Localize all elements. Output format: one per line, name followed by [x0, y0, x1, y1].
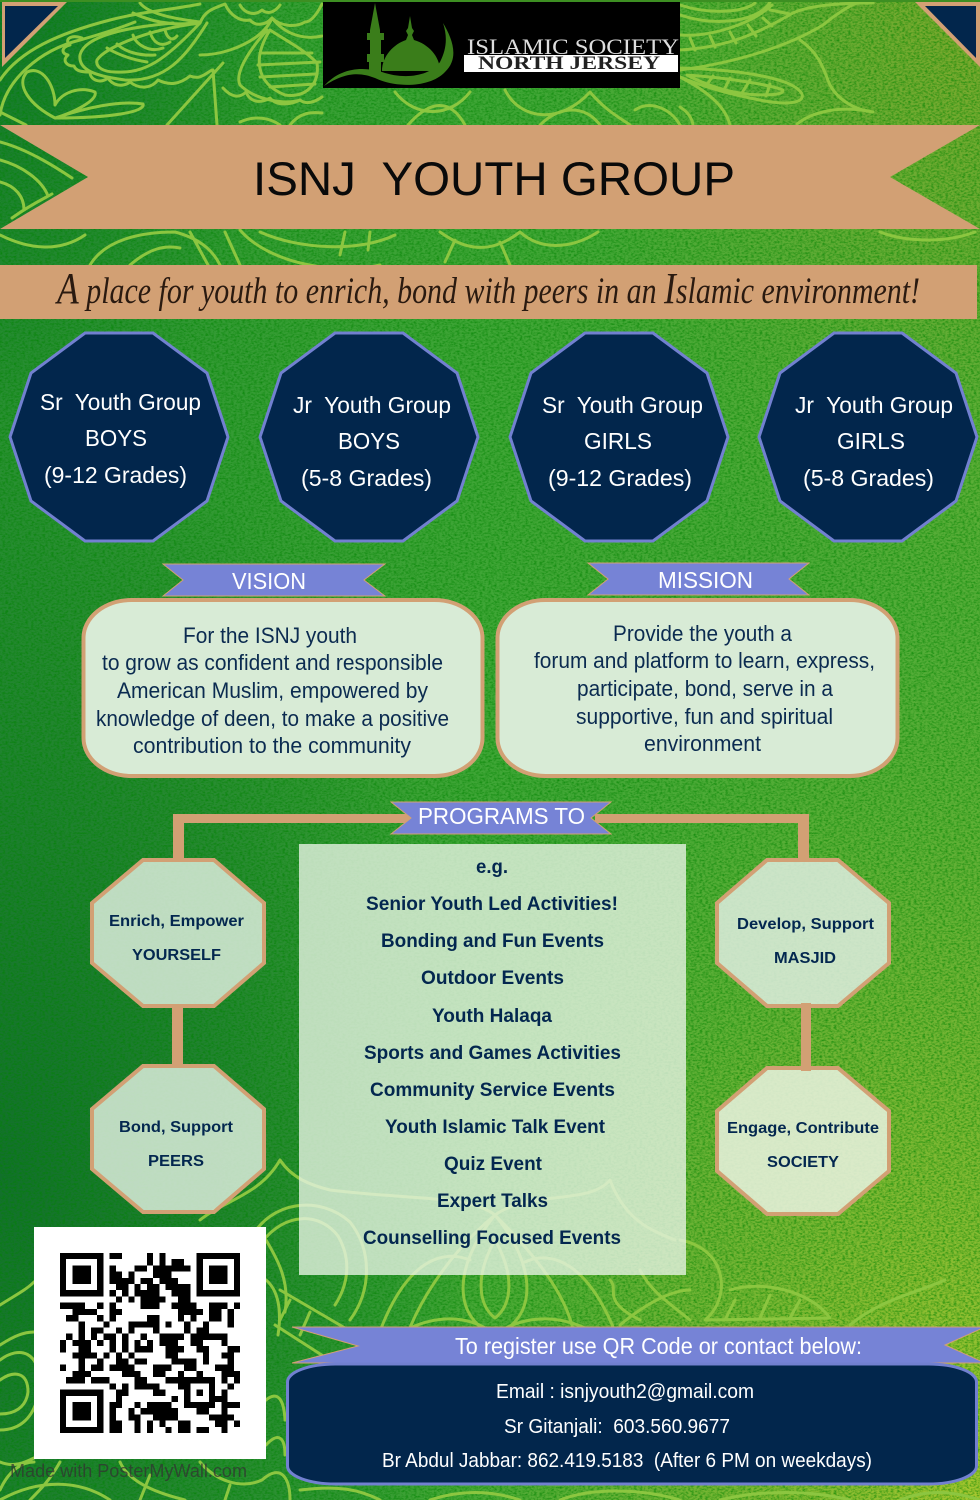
mission ribbon [588, 563, 809, 595]
vision panel: knowledge of deen, to make a positive [96, 706, 449, 731]
mission panel: Provide the youth a [613, 621, 793, 646]
programs list panel: e.g. [476, 857, 508, 878]
group badge: Sr girls: (9-12 Grades) [548, 465, 692, 491]
group badge: Sr boys: (9-12 Grades) [44, 462, 187, 488]
group badge: Sr boys: BOYS [85, 425, 147, 451]
program node: society: Engage, Contribute [727, 1120, 879, 1137]
programs list panel: Quiz Event [444, 1154, 543, 1175]
logo subtitle: NORTH JERSEY [478, 53, 660, 74]
group badge: Jr girls [759, 333, 977, 541]
group badge: Jr girls: GIRLS [837, 428, 905, 454]
corner ornament: top right [915, 2, 980, 67]
programs list panel [299, 844, 686, 1275]
vision ribbon [163, 564, 385, 596]
mission ribbon: MISSION [658, 567, 753, 593]
group badge: Sr girls [510, 333, 728, 541]
logo icon: mosque and crescent [324, 3, 453, 86]
group badge: Sr boys [10, 333, 228, 541]
program node: society: SOCIETY [767, 1154, 839, 1171]
logo text: ISLAMIC SOCIETY [467, 34, 679, 59]
connector arm: right [595, 814, 809, 858]
group badge: Jr girls: Jr Youth Group [795, 392, 953, 418]
group badge: Jr boys: (5-8 Grades) [301, 465, 432, 491]
programs ribbon: PROGRAMS TO [418, 803, 585, 829]
group badge: Sr girls: GIRLS [584, 428, 652, 454]
programs list panel: Community Service Events [370, 1080, 615, 1101]
program node: society [717, 1068, 889, 1214]
paisley line art: top [0, 2, 975, 269]
program node: peers: PEERS [148, 1153, 204, 1170]
vision panel [84, 600, 482, 776]
programs list panel: Outdoor Events [421, 968, 564, 989]
programs list panel: Youth Islamic Talk Event [385, 1117, 606, 1138]
programs list panel: Senior Youth Led Activities! [366, 894, 618, 915]
group badge: Jr girls: (5-8 Grades) [803, 465, 934, 491]
group badge: Sr girls: Sr Youth Group [542, 392, 703, 418]
corner ornament: top left [2, 2, 67, 67]
program node: peers: Bond, Support [119, 1119, 234, 1136]
QR code [34, 1227, 266, 1459]
connector: masjid to society [801, 1003, 811, 1071]
program node: masjid: MASJID [774, 950, 836, 967]
connector: yourself to peers [172, 1005, 183, 1066]
vision panel: contribution to the community [133, 733, 411, 758]
vision ribbon: VISION [232, 568, 306, 594]
program node: yourself: Enrich, Empower [109, 913, 244, 930]
programs list panel: Bonding and Fun Events [381, 931, 604, 952]
program node: yourself [92, 860, 264, 1006]
title: ISNJ YOUTH GROUP [253, 152, 735, 205]
paisley line art: bottom [0, 1160, 980, 1500]
connector arm: left [173, 814, 411, 858]
contact panel [288, 1364, 976, 1484]
mission panel: supportive, fun and spiritual [576, 704, 833, 729]
programs list panel: Youth Halaqa [432, 1006, 552, 1027]
vision panel: For the ISNJ youth [183, 623, 357, 648]
watermark: Made with PosterMyWall.com [10, 1461, 247, 1481]
programs list panel: Expert Talks [437, 1191, 548, 1212]
group badge: Jr boys: BOYS [338, 428, 400, 454]
program node: peers [92, 1066, 264, 1212]
group badge: Sr boys: Sr Youth Group [40, 389, 201, 415]
programs list panel: Sports and Games Activities [364, 1043, 621, 1064]
title banner [0, 125, 980, 229]
vision panel: to grow as confident and responsible [102, 650, 443, 675]
contact panel: Email : isnjyouth2@gmail.com [496, 1381, 754, 1403]
contact panel: Sr Gitanjali: 603.560.9677 [504, 1416, 730, 1438]
mission panel: forum and platform to learn, express, [534, 648, 875, 673]
programs ribbon [391, 802, 611, 834]
tagline: A place for youth to enrich, bond with peers in an Islamic environment! [55, 264, 920, 313]
group badge: Jr boys [260, 333, 478, 541]
program node: yourself: YOURSELF [132, 947, 221, 964]
vision panel: American Muslim, empowered by [117, 678, 428, 703]
register ribbon: To register use QR Code or contact below: [455, 1333, 862, 1359]
top edge strip [0, 0, 980, 2]
programs list panel: Counselling Focused Events [363, 1228, 621, 1249]
mission panel: environment [644, 731, 761, 756]
contact panel: Br Abdul Jabbar: 862.419.5183 (After 6 PM on weekdays) [382, 1450, 872, 1472]
program node: masjid: Develop, Support [737, 916, 875, 933]
logo [323, 2, 680, 88]
program node: masjid [717, 860, 889, 1006]
mission panel: participate, bond, serve in a [577, 676, 834, 701]
register ribbon [292, 1327, 980, 1363]
mission panel [498, 600, 898, 776]
group badge: Jr boys: Jr Youth Group [293, 392, 451, 418]
tagline strip [0, 264, 977, 319]
